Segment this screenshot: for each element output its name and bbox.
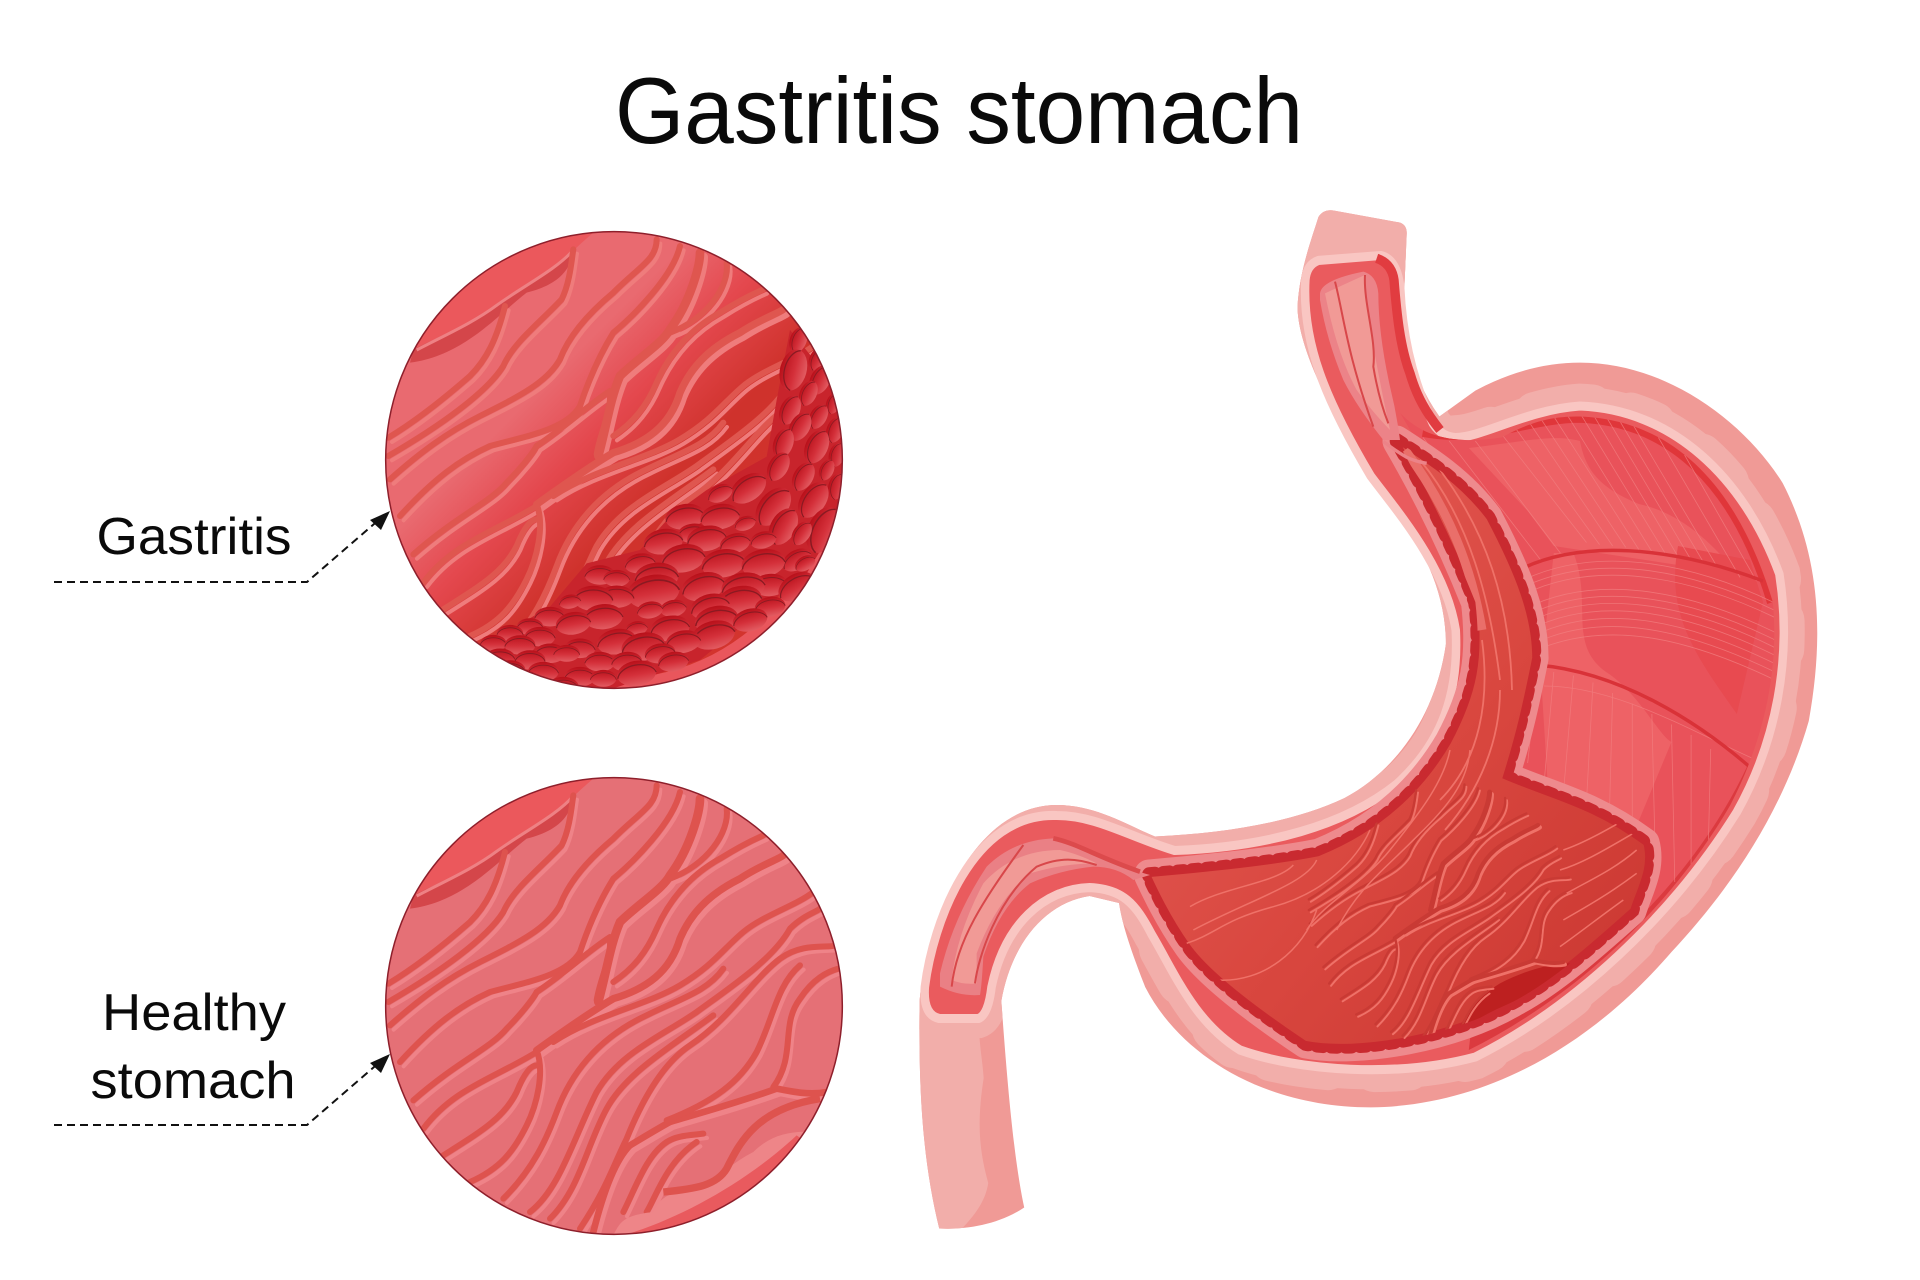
top-left fold [400, 779, 593, 912]
muscle top shadow [1423, 416, 1773, 602]
esophagus inner tube [1320, 258, 1440, 463]
label: Healthy stomach: Healthy [102, 984, 286, 1042]
duodenum inner tube [940, 838, 1150, 995]
panel: gastritis tissue circle [386, 232, 848, 697]
mucosa dark lower patch [1461, 964, 1570, 1024]
stomach wall [925, 256, 1784, 1070]
panel: healthy tissue circle [386, 778, 847, 1239]
label: Gastritis: Gastritis [96, 508, 292, 566]
title: Gastritis stomach [615, 58, 1303, 163]
muscle band: upper [1518, 550, 1763, 581]
mucosa frill edge [1148, 441, 1647, 1046]
arrow: Healthy stomach callout [54, 1054, 390, 1125]
label: Healthy stomach [90, 984, 296, 1110]
inflamed bumps [480, 325, 848, 697]
muscle layer [1402, 415, 1774, 1050]
muscle bottom shadow [1469, 770, 1756, 1050]
mucosa folds [1187, 450, 1637, 1046]
bottom-right fold [614, 1096, 820, 1234]
lighter serosa patches [913, 203, 1784, 1232]
arrow: Gastritis callout [54, 511, 390, 582]
muscle band: lower [1537, 665, 1753, 770]
muscle oblique fibers [1423, 413, 1776, 889]
outer serosa layer [919, 210, 1817, 1229]
muscle highlight patches [1469, 438, 1720, 564]
mucosa floor [1148, 441, 1647, 1046]
illustration: stomach cross-section [913, 203, 1817, 1232]
label: Healthy stomach: stomach [90, 1052, 296, 1110]
rim band [616, 552, 822, 688]
top-left fold [400, 233, 593, 366]
